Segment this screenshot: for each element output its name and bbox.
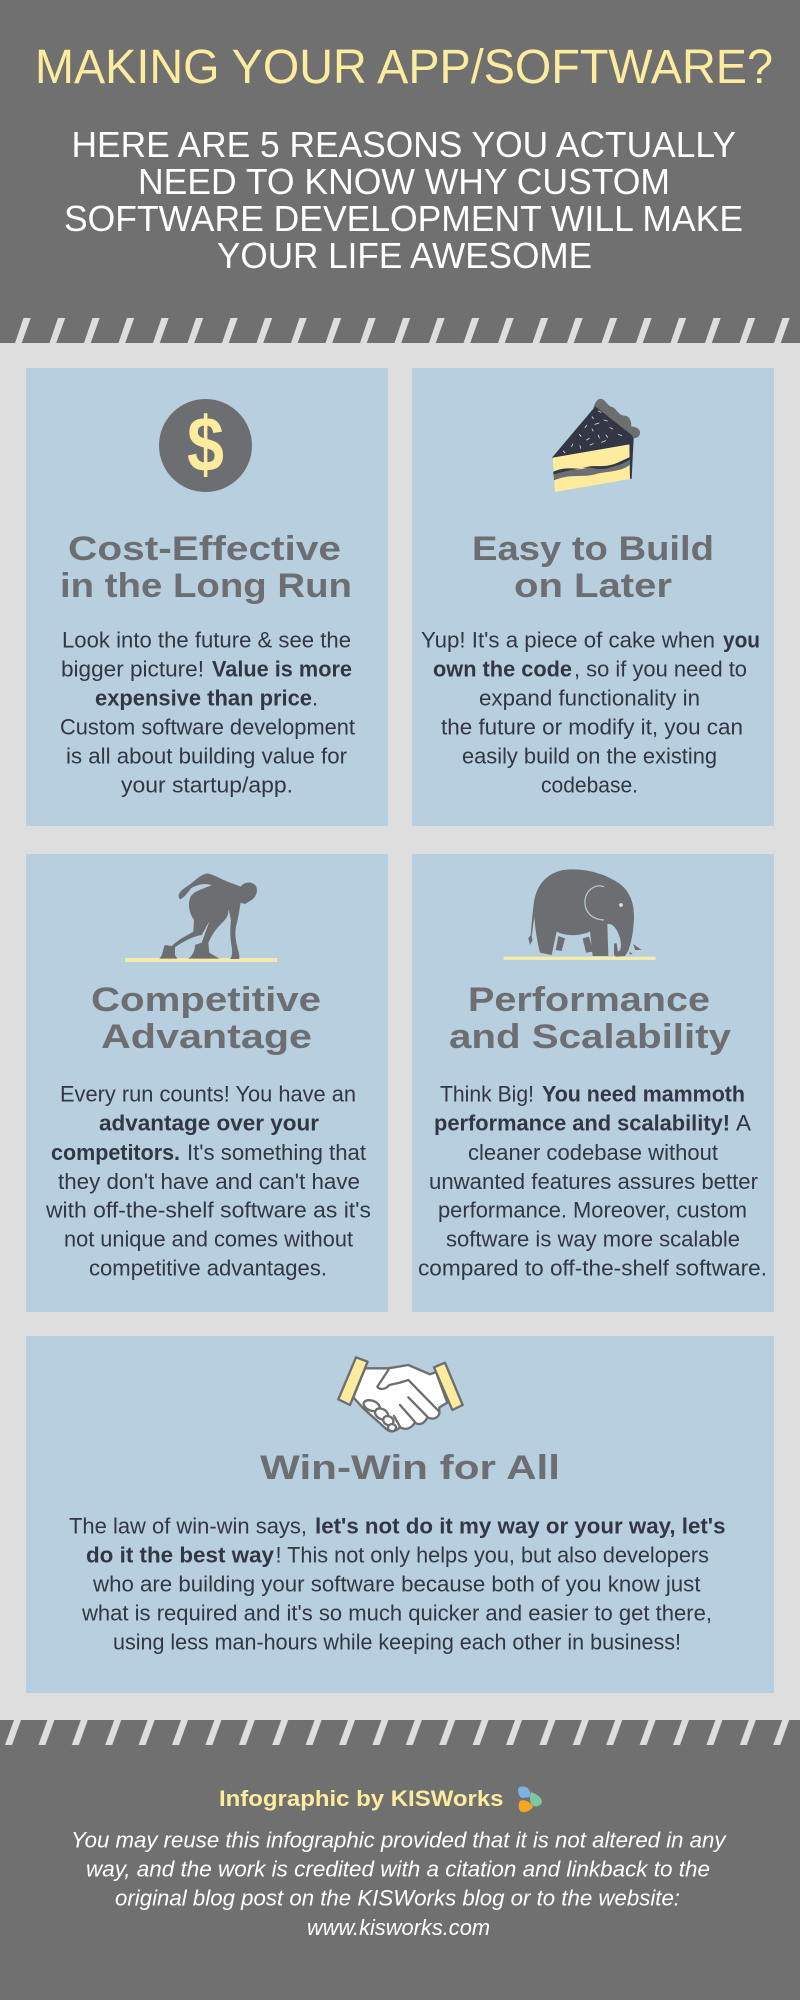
text: performance body: Think Big! <box>440 1082 534 1107</box>
heading: easy to build: Easy to Build <box>472 530 714 568</box>
heading: competitive advantage: Competitive <box>91 981 321 1019</box>
text: competitive advantage body: they don't have and can't have <box>58 1169 360 1194</box>
icon: dollar coin <box>159 399 252 492</box>
heading: cost-effective: in the Long Run <box>60 567 352 605</box>
text: easy to build body: codebase. <box>541 773 638 798</box>
panel: easy to build <box>412 368 774 826</box>
heading: competitive advantage: Advantage <box>101 1018 312 1056</box>
heading: performance and scalability <box>449 981 731 1056</box>
heading: performance and scalability: and Scalability <box>449 1018 731 1056</box>
text: cost-effective body: is all about building value for <box>66 743 347 768</box>
text: easy to build body: the future or modify it, you can <box>441 714 743 739</box>
subtitle: YOUR LIFE AWESOME <box>217 235 592 276</box>
text: performance body: unwanted features assures better <box>429 1169 758 1194</box>
heading: cost-effective: Cost-Effective <box>68 530 341 568</box>
icon: KISWorks logo <box>518 1786 542 1812</box>
text: performance body: A <box>736 1111 751 1136</box>
heading: win-win: Win-Win for All <box>260 1449 560 1487</box>
text: reuse notice: original blog post on the KISWorks blog or to the website: <box>115 1886 680 1911</box>
subtitle: SOFTWARE DEVELOPMENT WILL MAKE <box>64 198 743 239</box>
text: easy to build body: you <box>723 628 760 653</box>
text: competitive advantage body: competitive advantages. <box>89 1256 327 1281</box>
text: competitive advantage body: competitors. <box>51 1140 180 1165</box>
text: cost-effective body <box>60 628 355 798</box>
footer <box>71 1786 728 1940</box>
text: cost-effective body: bigger picture! <box>61 657 204 682</box>
text: reuse notice <box>71 1828 728 1940</box>
text: easy to build body: Yup! It's a piece of cake when <box>421 628 715 653</box>
text: reuse notice: way, and the work is credited with a citation and linkback to the <box>86 1857 710 1882</box>
text: easy to build body: own the code <box>433 657 572 682</box>
text: performance body: You need mammoth <box>542 1082 745 1107</box>
heading: easy to build: on Later <box>514 567 672 605</box>
text: easy to build body <box>421 628 760 798</box>
heading: competitive advantage <box>91 981 321 1056</box>
text: win-win body: what is required and it's so much quicker and easier to get there, <box>81 1601 712 1626</box>
title: MAKING YOUR APP/SOFTWARE? <box>35 41 773 94</box>
subtitle <box>64 124 743 276</box>
subtitle: HERE ARE 5 REASONS YOU ACTUALLY <box>72 124 736 165</box>
heading: cost-effective <box>60 530 352 605</box>
text: cost-effective body: expensive than price <box>95 686 312 711</box>
text: easy to build body: , so if you need to <box>574 657 747 682</box>
text: performance body: software is way more scalable <box>446 1227 740 1252</box>
text: performance body: performance. Moreover, custom <box>438 1198 747 1223</box>
text: competitive advantage body: It's something that <box>187 1140 366 1165</box>
text: win-win body: do it the best way <box>86 1542 275 1567</box>
text: cost-effective body: your startup/app. <box>121 773 293 798</box>
text: competitive advantage body: not unique and comes without <box>64 1227 353 1252</box>
text: cost-effective body: Custom software development <box>60 714 355 739</box>
panel: cost-effective <box>26 368 388 826</box>
text: competitive advantage body: with off-the-shelf software as it's <box>45 1198 371 1223</box>
icon: handshake <box>338 1357 463 1431</box>
text: cost-effective body: Value is more <box>212 657 352 682</box>
heading: easy to build <box>472 530 714 605</box>
text: easy to build body: easily build on the existing <box>462 743 717 768</box>
text: performance body: cleaner codebase without <box>468 1140 718 1165</box>
text: easy to build body: expand functionality in <box>479 686 700 711</box>
text: competitive advantage body <box>45 1082 371 1281</box>
text: performance body: performance and scalability! <box>434 1111 730 1136</box>
text: performance body: compared to off-the-shelf software. <box>418 1256 767 1281</box>
icon: cake slice <box>552 399 640 492</box>
text: win-win body: who are building your software because both of you know just <box>92 1572 701 1597</box>
heading: performance and scalability: Performance <box>468 981 710 1019</box>
text: performance body <box>418 1082 767 1281</box>
text: competitive advantage body: Every run counts! You have an <box>60 1082 356 1107</box>
subtitle: NEED TO KNOW WHY CUSTOM <box>138 161 670 202</box>
text: win-win body: using less man-hours while keeping each other in business! <box>113 1629 681 1654</box>
icon: sprinter <box>125 873 277 962</box>
panel: performance and scalability <box>412 854 774 1312</box>
text: cost-effective body: Look into the future & see the <box>62 628 351 653</box>
text: reuse notice: www.kisworks.com <box>307 1915 490 1940</box>
footer credit: Infographic by KISWorks <box>219 1786 504 1811</box>
text: win-win body: The law of win-win says, <box>69 1513 307 1538</box>
text: win-win body <box>69 1513 726 1654</box>
header <box>35 41 773 276</box>
panel: competitive advantage <box>26 854 388 1312</box>
text: win-win body: ! This not only helps you, but also developers <box>276 1542 709 1567</box>
text: reuse notice: You may reuse this infographic provided that it is not altered in any <box>71 1828 728 1853</box>
text: cost-effective body: . <box>312 686 318 711</box>
text: win-win body: let's not do it my way or your way, let's <box>315 1513 726 1538</box>
text: competitive advantage body: advantage over your <box>99 1111 319 1136</box>
icon: dollar coin: $ <box>187 400 224 488</box>
icon: elephant <box>504 869 656 960</box>
panel: win-win <box>26 1336 774 1693</box>
